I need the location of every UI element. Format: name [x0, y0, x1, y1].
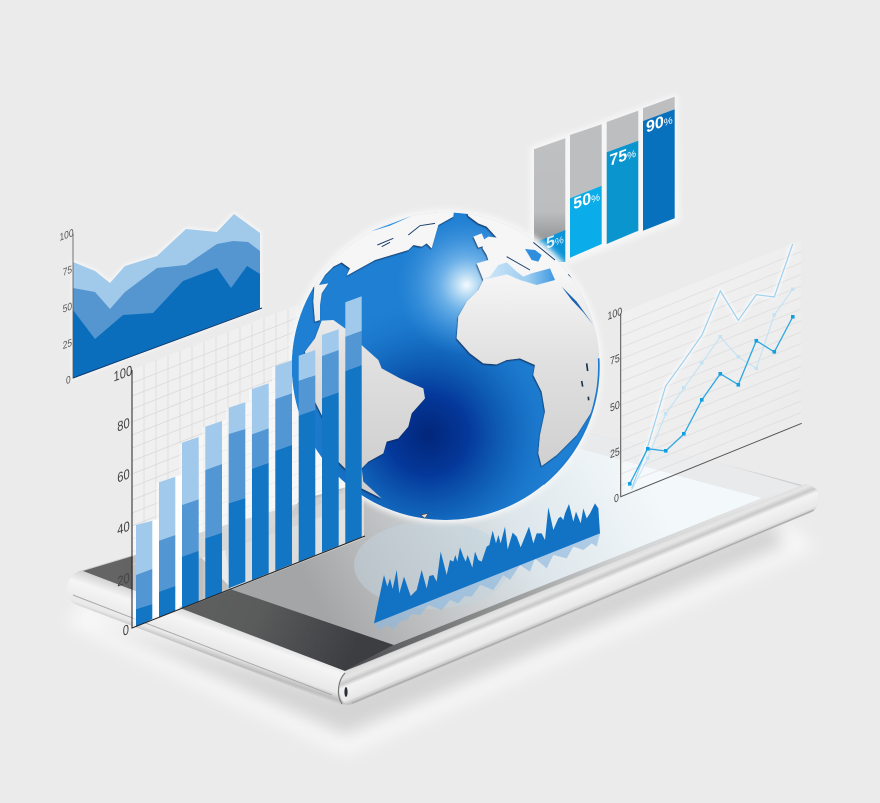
bar: 25 percent: 5%: [546, 229, 564, 253]
bars glow: [530, 93, 680, 264]
stacked area chart: [60, 214, 262, 388]
area chart axis labels: 50: [63, 300, 73, 316]
phone speaker mark: [344, 687, 348, 697]
phone shadow: [68, 522, 815, 755]
bar 7: [275, 360, 292, 571]
line chart panel: [621, 240, 801, 497]
phone display: [225, 443, 762, 645]
area chart axis labels: 100: [60, 227, 74, 244]
sea: top edge sliver: [370, 216, 412, 232]
area chart axis labels: 0: [66, 374, 71, 388]
phone seam: [73, 510, 814, 703]
ocean: [292, 212, 599, 520]
phone end cap: [338, 673, 345, 704]
bar 5: [229, 402, 245, 588]
bar 10: [345, 296, 362, 543]
line chart axis labels: 100: [608, 306, 622, 323]
land: Eurasia and Africa: [457, 202, 610, 466]
area chart axis labels: 75: [63, 264, 73, 279]
bar 3: [182, 437, 199, 608]
bar: 75 percent: [607, 111, 638, 244]
line chart axis labels: [608, 306, 622, 506]
bar chart axis labels: 100: [114, 362, 132, 385]
white glow behind bars: [133, 295, 364, 628]
phone long side strip: [340, 484, 819, 704]
area chart axis labels: 25: [63, 337, 73, 353]
sea: Red Sea sliver: [562, 287, 593, 325]
bar chart axis labels: 80: [117, 414, 130, 435]
area glow: [73, 214, 260, 378]
line chart grid: [621, 252, 801, 486]
spectrum area chart reflection: [374, 533, 600, 630]
bar chart axis labels: 20: [117, 569, 130, 590]
line series glow: [632, 244, 793, 488]
globe glow: [288, 209, 602, 523]
line chart axis labels: 25: [610, 446, 620, 462]
infographic: globe and charts rising from a smartphone: [60, 97, 818, 749]
percentage bars: [530, 93, 680, 264]
area chart axis labels: [60, 227, 74, 388]
bar chart axis labels: 60: [117, 465, 130, 486]
rim: [543, 358, 599, 484]
bar chart axes: [132, 370, 365, 628]
globe: [292, 202, 610, 520]
phone bezel back edge: [560, 427, 800, 498]
seas and coast marks: [370, 216, 593, 518]
land: north cap and Greenland: [312, 212, 454, 324]
white gaps at lower bars: [152, 519, 159, 618]
phone bezel right: [233, 427, 800, 671]
line chart axes: [621, 313, 802, 497]
bar 9: [322, 329, 339, 552]
bars: [136, 296, 362, 627]
phone body: [67, 427, 819, 705]
bar: 50 percent: [570, 124, 602, 258]
sea: Baltic: [525, 249, 542, 262]
bar: 50 percent: 50%: [573, 186, 600, 213]
bar chart axis labels: 40: [117, 517, 130, 538]
phone bezel left: [83, 538, 394, 671]
bar 1: [136, 521, 152, 627]
bar: 25 percent: [534, 138, 565, 262]
area: medium layer: [73, 241, 260, 378]
bar: 90 percent: 90%: [646, 110, 673, 137]
line series: medium: [632, 288, 794, 490]
line series: light: [632, 244, 793, 488]
area: dark layer: [73, 266, 260, 378]
sea: Mediterranean: [483, 262, 555, 285]
bar 4: [205, 421, 222, 599]
smartphone: [67, 427, 819, 705]
bar 6: [252, 383, 269, 580]
bar 2: [159, 477, 175, 618]
bar 8: [299, 350, 315, 562]
stacked bar chart: [114, 296, 365, 639]
bar chart axis labels: [114, 362, 132, 639]
line chart: [608, 240, 802, 506]
spectrum area chart: [374, 503, 600, 623]
line series: dark: [628, 315, 795, 486]
land: South America: [305, 320, 425, 498]
phone top band: [182, 488, 362, 562]
area chart axes: [73, 233, 262, 378]
line chart axis labels: 75: [610, 353, 620, 368]
line chart axis labels: 50: [610, 399, 620, 415]
coast marks: [377, 223, 573, 279]
continents: [295, 202, 610, 498]
line chart axis labels: 0: [614, 492, 619, 506]
area: light layer: [73, 214, 260, 378]
bar: 90 percent: [643, 97, 675, 231]
bar chart grid panel: [132, 286, 364, 628]
bar chart axis labels: 0: [123, 621, 129, 639]
bar: 75 percent: 75%: [609, 143, 636, 170]
globe reflection: [354, 521, 510, 609]
land: British Isles: [473, 233, 487, 248]
